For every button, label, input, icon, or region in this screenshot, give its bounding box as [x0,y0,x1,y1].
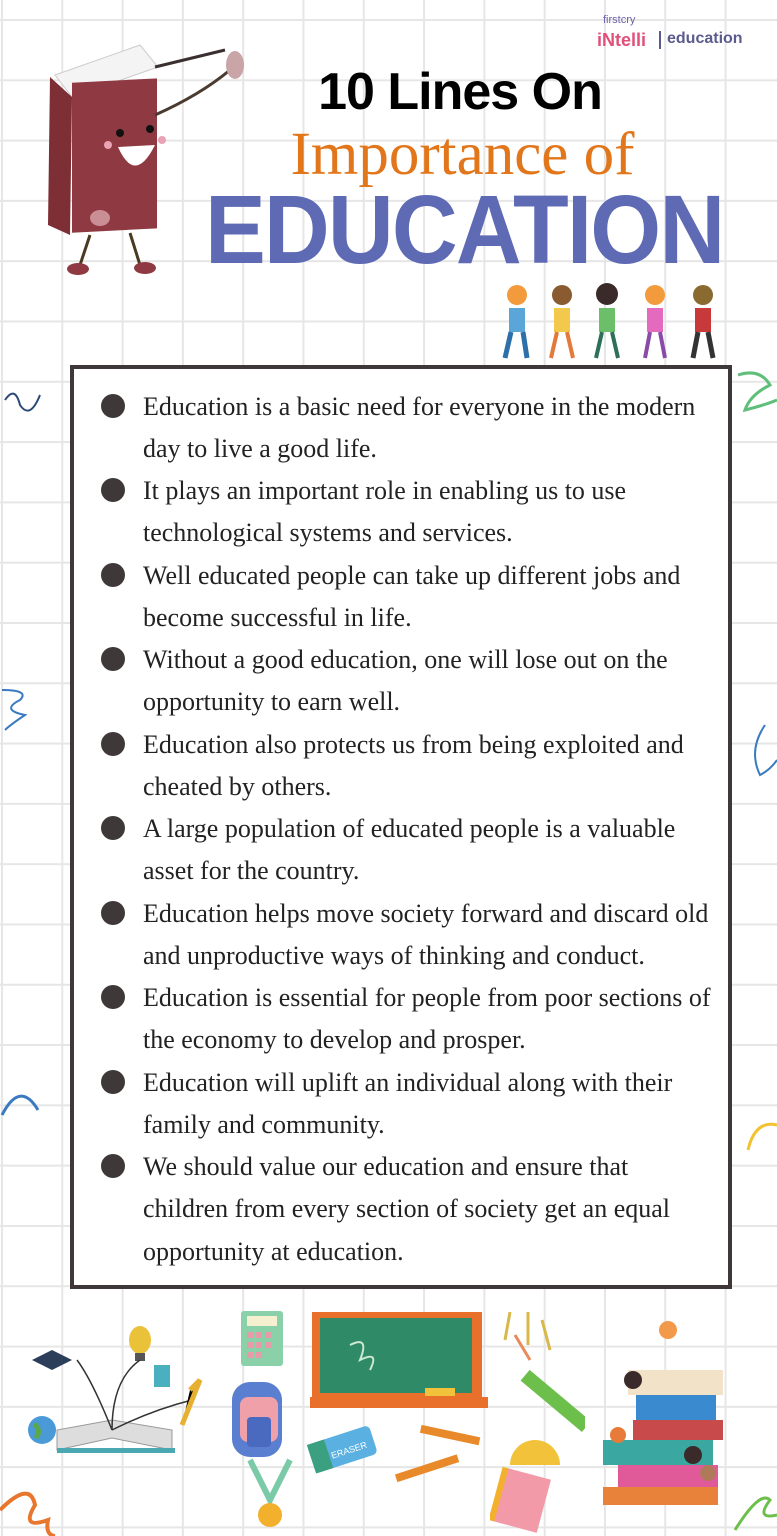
logo: education [667,30,743,47]
panel: ten lines: Education is a basic need for everyone in the modern [143,392,695,421]
panel: ten lines: asset for the country. [143,856,359,885]
illustration: medal [247,1458,293,1527]
item 1 [101,392,695,463]
title: 10 Lines On [318,63,602,121]
logo: firstcry [603,14,635,26]
panel: ten lines: become successful in life. [143,603,412,632]
illustration: open book with ideas [28,1326,202,1453]
panel: ten lines: Education helps move society forward and discard old [143,899,708,928]
illustration: eraser and pencils: ERASER [330,1440,369,1461]
panel: ten lines: opportunity at education. [143,1237,404,1266]
panel: ten lines: technological systems and services. [143,518,513,547]
panel: ten lines: family and community. [143,1110,385,1139]
panel: ten lines: Well educated people can take up different jobs and [143,561,680,590]
panel: ten lines: Education is essential for people from poor sections of [143,983,711,1012]
panel: ten lines: Education also protects us from being exploited and [143,730,684,759]
title [205,63,723,284]
illustration: eraser and pencils [306,1424,480,1482]
item 10 [101,1152,670,1266]
panel: ten lines: and unproductive ways of thinking and conduct. [143,941,645,970]
logo: iNtelli [597,30,646,50]
illustration: kids on stack of books [603,1321,723,1505]
title: Importance of [291,121,634,188]
item 5 [101,730,684,801]
kids illustration [502,283,716,358]
mascot: book character [48,44,244,275]
item 8 [101,983,711,1054]
item 4 [101,645,668,716]
item 9 [101,1068,672,1139]
illustration: chalkboard [310,1312,488,1408]
panel: ten lines: It plays an important role in enabling us to use [143,476,626,505]
item 7 [101,899,708,970]
illustration: backpack [232,1382,282,1457]
illustration: calculator [241,1311,283,1366]
panel: ten lines: We should value our education and ensure that [143,1152,628,1181]
panel: ten lines: A large population of educated people is a valuable [143,814,675,843]
panel: ten lines: cheated by others. [143,772,331,801]
panel: ten lines: Without a good education, one will lose out on the [143,645,668,674]
logo [597,14,743,50]
panel: ten lines: the economy to develop and prosper. [143,1025,526,1054]
panel: ten lines: Education will uplift an individual along with their [143,1068,672,1097]
squiggles decorations [0,371,777,1536]
panel: ten lines [70,365,732,1289]
panel: ten lines: opportunity to earn well. [143,687,400,716]
illustration: paper clips, ruler, protractor, notebook [490,1312,585,1533]
title: EDUCATION [205,175,723,284]
item 6 [101,814,675,885]
panel: ten lines: children from every section of society get an equal [143,1194,670,1223]
panel: ten lines: day to live a good life. [143,434,377,463]
item 2 [101,476,626,547]
item 3 [101,561,680,632]
